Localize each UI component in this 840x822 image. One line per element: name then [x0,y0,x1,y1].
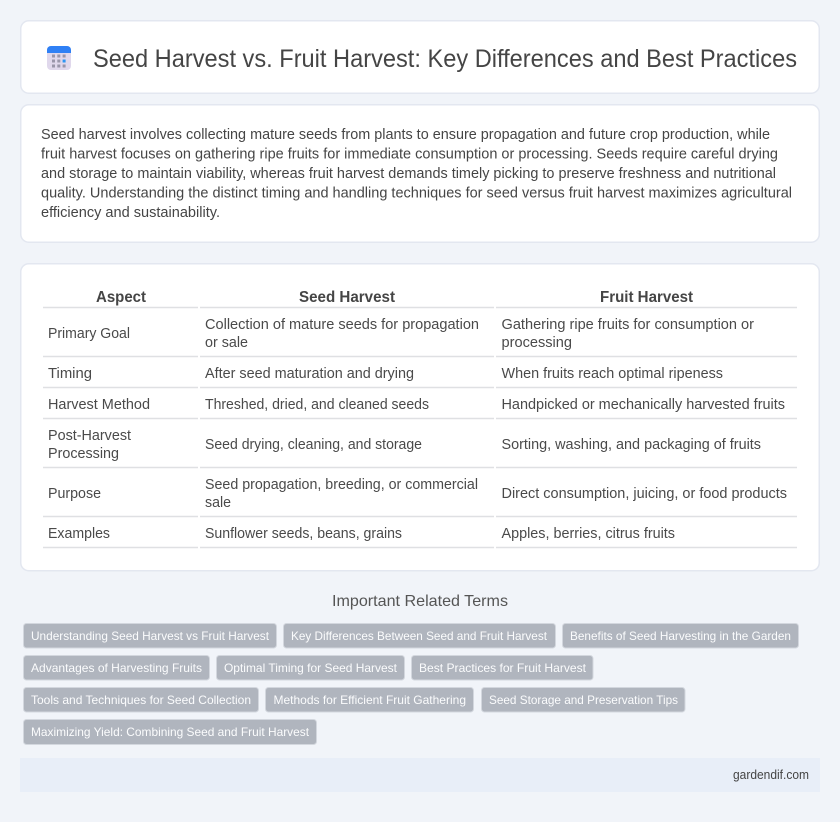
intro paragraph: fruit harvest focuses on gathering ripe fruits for immediate consumption or processing. Seeds require careful drying [41,146,778,162]
row: timing [48,366,723,382]
intro paragraph: Seed harvest involves collecting mature seeds from plants to ensure propagation and future crop production, while [41,127,770,143]
row: purpose: sale [205,495,231,511]
tag: Maximizing Yield: Combining Seed and Fruit Harvest [31,725,310,739]
tag [412,656,593,680]
row: harvest method: Handpicked or mechanically harvested fruits [502,397,785,413]
tag [284,624,556,648]
row: harvest method: Threshed, dried, and cleaned seeds [205,397,429,413]
table header row: Seed Harvest [299,289,396,306]
intro paragraph: and storage to maintain viability, whereas fruit harvest demands timely picking to preserve freshness and nutritional [41,166,776,182]
row: primary goal: Primary Goal [48,326,130,342]
tag [562,624,798,648]
row: purpose [48,477,787,511]
panel: comparison table [21,264,819,571]
related term tags [24,624,798,744]
tag: Tools and Techniques for Seed Collection [31,693,251,707]
row: post-harvest processing: Post-Harvest [48,428,131,444]
row: primary goal [48,317,754,351]
tag: Best Practices for Fruit Harvest [419,661,587,675]
panel: intro text [21,105,819,242]
tag [24,624,276,648]
footer bar [20,758,820,792]
row: harvest method: Harvest Method [48,397,150,413]
row: timing: When fruits reach optimal ripeness [502,366,723,382]
row: primary goal: Gathering ripe fruits for consumption or [502,317,754,333]
heading: important related terms: Important Related Terms [332,593,508,610]
icon: calendar [47,46,71,70]
row: examples: Examples [48,526,110,542]
row: primary goal: or sale [205,335,248,351]
row: examples: Apples, berries, citrus fruits [502,526,675,542]
row: timing: After seed maturation and drying [205,366,414,382]
tag: Methods for Efficient Fruit Gathering [274,693,466,707]
row: post-harvest processing: Processing [48,446,119,462]
tag: Understanding Seed Harvest vs Fruit Harvest [31,629,270,643]
intro paragraph [41,127,792,221]
tag: Advantages of Harvesting Fruits [31,661,202,675]
row: post-harvest processing [48,428,761,462]
row: purpose: Purpose [48,486,101,502]
header panel [21,21,819,93]
row: primary goal: Collection of mature seeds for propagation [205,317,479,333]
intro paragraph: quality. Understanding the distinct timing and handling techniques for seed versus fruit harvest maximizes agricultural [41,186,792,202]
title: Seed Harvest vs. Fruit Harvest: Key Differences and Best Practices [93,45,797,73]
table header row: Aspect [96,289,147,306]
row: primary goal: processing [502,335,572,351]
row: purpose: Direct consumption, juicing, or food products [502,486,787,502]
row: post-harvest processing: Seed drying, cleaning, and storage [205,437,422,453]
table header row: Fruit Harvest [600,289,694,306]
tag: Benefits of Seed Harvesting in the Garden [570,629,791,643]
row: examples: Sunflower seeds, beans, grains [205,526,402,542]
tag: Optimal Timing for Seed Harvest [224,661,398,675]
table header row [96,289,694,306]
intro paragraph: efficiency and sustainability. [41,205,220,221]
tag [482,688,685,712]
footer source text: gardendif.com [733,767,809,782]
tag [24,688,258,712]
tag [216,656,404,680]
tag [24,656,210,680]
row: examples [48,526,675,542]
row: harvest method [48,397,785,413]
tag: Key Differences Between Seed and Fruit Harvest [291,629,548,643]
tag: Seed Storage and Preservation Tips [489,693,678,707]
tag [24,720,316,744]
row: timing: Timing [48,366,92,382]
tag [266,688,474,712]
row: purpose: Seed propagation, breeding, or commercial [205,477,478,493]
row: post-harvest processing: Sorting, washing, and packaging of fruits [502,437,761,453]
